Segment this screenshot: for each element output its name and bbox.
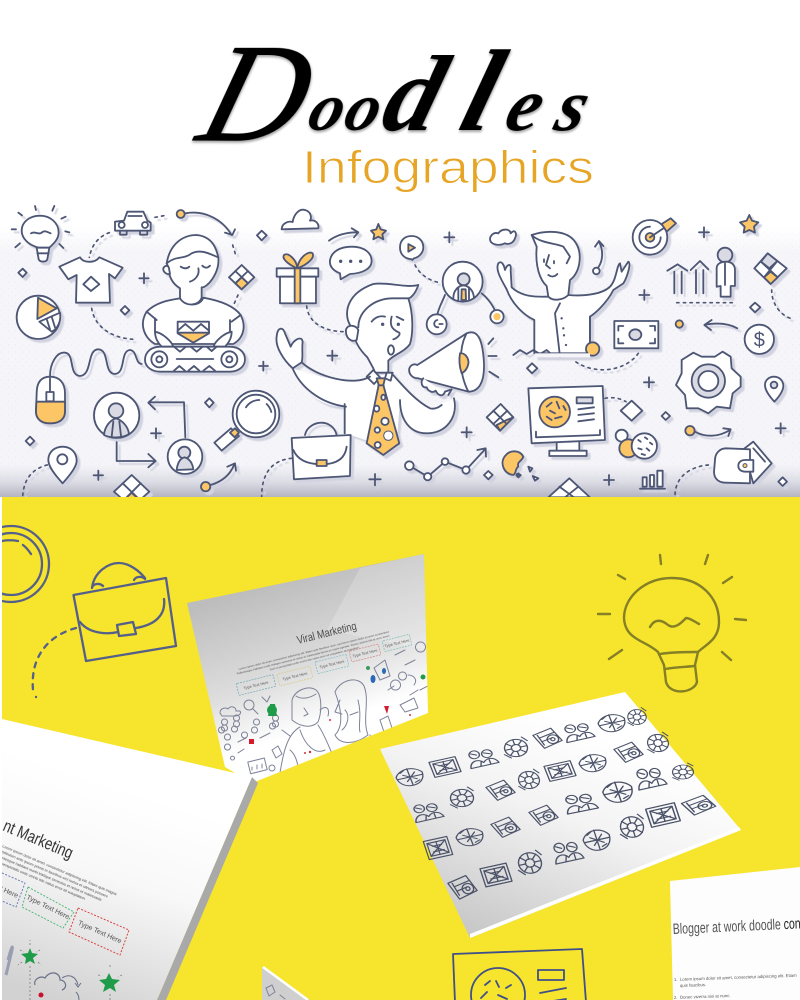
- raised hand: [276, 329, 303, 368]
- arrow: orange dot curve: [177, 210, 238, 303]
- icon: star right: [740, 215, 758, 233]
- icon: speech bubble: [330, 247, 372, 279]
- plus signs: [94, 227, 786, 485]
- title: Doodles script: l: [449, 27, 518, 155]
- list text: [674, 973, 797, 1000]
- lorem lines: Lorem ipsum dolor sit amet, consectetur adipiscing elit. Etiam quis magna: [2, 844, 118, 897]
- icon: gift: [277, 253, 318, 303]
- icon: monitor on yellow: [453, 949, 586, 1000]
- text boxes: Type Text Here: [384, 638, 410, 649]
- icon: tile centre: [487, 404, 513, 431]
- line graph with arrow: [405, 448, 486, 480]
- small diamonds: [18, 231, 787, 486]
- icon: avatar small: [168, 439, 202, 474]
- icon: briefcase on yellow: [33, 563, 176, 698]
- icon: dollar coin with arrow: $: [754, 330, 765, 352]
- icon: star: [371, 224, 386, 239]
- mockup: blogger sheet: [670, 867, 800, 1000]
- arrows between avatars: [117, 397, 185, 467]
- icon: target: [633, 218, 676, 255]
- title: Doodles script: e: [497, 62, 555, 147]
- icon rows: [394, 707, 717, 900]
- arrow small orange: [201, 463, 236, 491]
- icon: monitor: [528, 386, 642, 456]
- icon: cloud: [282, 210, 318, 229]
- tie: [367, 378, 399, 455]
- second man arms up: [497, 232, 629, 357]
- icon: dollar coin with arrow: [676, 320, 774, 354]
- list text: quis faucibus.: [680, 982, 706, 988]
- growth arrows and person: [667, 248, 735, 303]
- icon: car: [115, 212, 151, 235]
- icon: tile diamond: [229, 265, 254, 289]
- title: [183, 16, 614, 193]
- icon: magnifier ring on yellow: [0, 526, 49, 602]
- icon: coins: [616, 430, 657, 459]
- head: [347, 283, 418, 373]
- icon: tile right: [754, 253, 791, 318]
- text boxes: [236, 634, 412, 695]
- title: Doodles script: d: [371, 34, 461, 154]
- doodle illustration: [12, 206, 791, 500]
- list text: 1. Lorem ipsum dolor sit amet, consectetur adipiscing elit. Etiam: [674, 973, 797, 982]
- text boxes: [0, 873, 129, 955]
- yellow section: [2, 497, 800, 1000]
- icon: magnifier: [214, 391, 279, 451]
- arrow to star: [329, 228, 358, 241]
- subtitle: Infographics: Infographics: [302, 141, 594, 193]
- icon: banknote: [574, 321, 658, 370]
- text boxes: Type Text Here: [77, 920, 123, 945]
- icon: play bubble: [400, 236, 440, 283]
- curved up arrow: [593, 241, 603, 274]
- icon: avatar large: [94, 393, 139, 438]
- title: Doodles script: o: [301, 70, 356, 146]
- title: Doodles script: o: [337, 70, 392, 146]
- icon: t-shirt: [59, 257, 123, 303]
- text boxes: Type Text Here: [25, 894, 70, 921]
- icon: tile cut bottom: [548, 478, 590, 497]
- icon: cloud small: [490, 230, 516, 245]
- icon: light bulb: [12, 206, 69, 262]
- mockup: icon set sheet: [380, 692, 741, 938]
- icon: wallet: [675, 442, 772, 496]
- text boxes: Type Text Here: [282, 671, 308, 682]
- icon: briefcase: [292, 404, 351, 479]
- arrow right low: [685, 426, 731, 436]
- icon: gear: [676, 352, 741, 413]
- list text: 2. Donec viverra nisi at nunc.: [674, 993, 731, 1000]
- small doodles: [219, 642, 428, 774]
- doodle people: [280, 679, 371, 772]
- doodle icons: [6, 940, 122, 1000]
- lorem lines: Pellentesque habitant morbi tristique senectus et netus et malesuada fames ac turpis egestas. Donec viverra nisi at nunc lorem: [236, 633, 391, 676]
- icon: location pin: [23, 447, 77, 497]
- left white strip: [0, 497, 2, 1000]
- mockup: content marketing sheet: [0, 719, 258, 1000]
- lorem lines: Sed ut perspiciatis unde omnis iste natus error sit voluptatem accusantium: [269, 645, 360, 671]
- title: Doodles script: s: [546, 65, 599, 147]
- icon: cookie: [503, 451, 538, 481]
- mouse with squiggle cable: [36, 349, 142, 423]
- main man with megaphone: [276, 283, 498, 455]
- lorem lines: Lorem ipsum dolor sit amet, consectetur adipiscing elit. Etiam quis faucibus nunc, sed lorem ipsum dolor sit amet consectetur: [238, 630, 390, 671]
- megaphone: [409, 332, 484, 392]
- doodle band background: [0, 240, 800, 497]
- mockup: partial sheet bottom: [262, 967, 310, 1000]
- heading: Marketing: nt Marketing: [0, 816, 76, 863]
- icon: pie chart: [17, 296, 60, 339]
- icon: light bulb on yellow: [598, 555, 746, 691]
- text boxes: Type Text Here: [319, 659, 345, 670]
- icon: bar chart: [640, 471, 665, 489]
- right half: [400, 215, 791, 497]
- mockup: Viral Marketing sheet: [187, 554, 428, 785]
- dashed connector: car to man: [89, 216, 164, 339]
- avatar network: [427, 262, 504, 334]
- body fill: [293, 368, 456, 442]
- text boxes: Type Text Here: [243, 680, 269, 691]
- heading: Viral Marketing: Viral Marketing: [296, 621, 358, 647]
- man on conveyor: [143, 235, 245, 372]
- icon: pin right: [765, 377, 783, 402]
- title: Doodles script: D: [183, 16, 331, 170]
- text boxes: Type Text Here: [352, 648, 378, 659]
- icon: tile bottom-left: [114, 475, 149, 500]
- lorem lines: Vestibulum ante ipsum primis in faucibus orci luctus et ultrices posuere: [0, 849, 109, 899]
